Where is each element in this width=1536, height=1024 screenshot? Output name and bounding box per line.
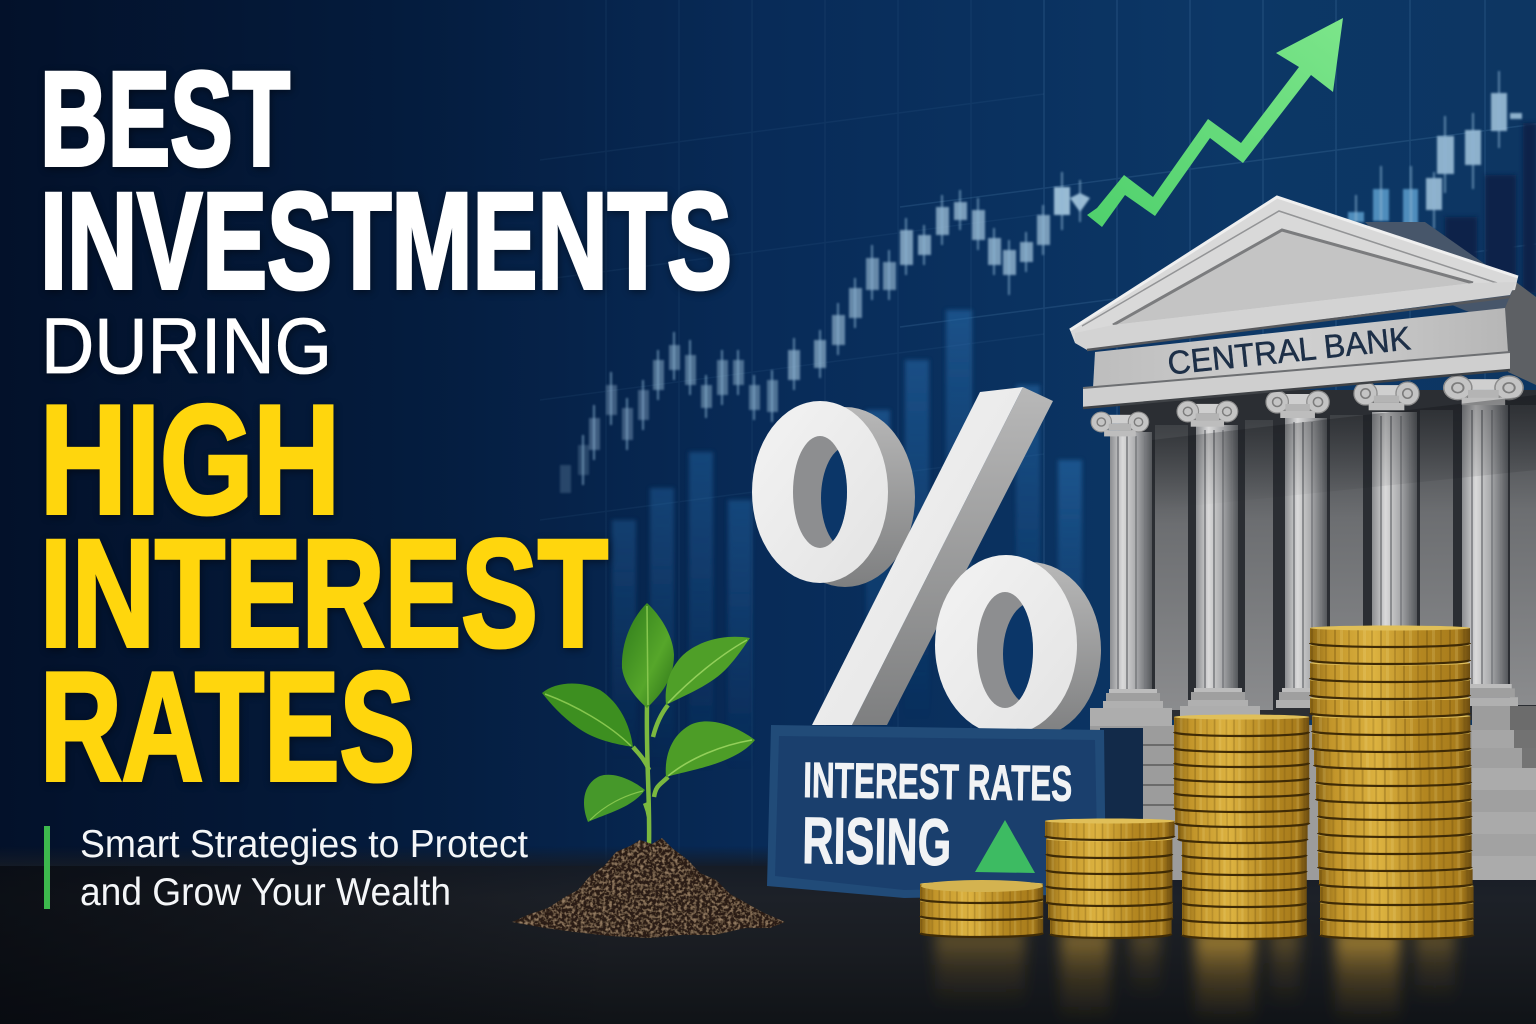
soil mound — [512, 838, 785, 938]
column: third — [1266, 391, 1336, 708]
icon: green triangle — [975, 820, 1035, 873]
rear pillars — [1155, 405, 1536, 710]
coin stack: second — [1045, 818, 1175, 938]
title line: best: BEST — [40, 45, 290, 194]
sign: interest rates rising: RISING — [802, 803, 952, 879]
bottom ring — [935, 555, 1101, 738]
leaf: top — [622, 603, 674, 708]
frieze — [1093, 308, 1508, 388]
horizontal cornice — [1075, 282, 1516, 350]
leaf: small — [584, 775, 645, 822]
label: central bank: CENTRAL BANK — [1166, 319, 1412, 382]
plant seedling — [512, 603, 785, 938]
left stairs — [1090, 725, 1536, 880]
slash — [812, 387, 1053, 725]
floor — [0, 846, 1536, 1024]
subtitle — [44, 823, 528, 914]
sign: interest rates rising — [767, 725, 1143, 898]
candlestick chart — [560, 71, 1522, 493]
column: fifth — [1444, 376, 1523, 706]
green accent bar — [44, 826, 50, 909]
pediment — [1070, 197, 1518, 343]
roof behind pediment — [1365, 222, 1536, 340]
title line: interest: INTEREST — [40, 508, 608, 679]
central bank building — [1070, 197, 1536, 880]
title line: high: HIGH — [40, 373, 340, 546]
title line: rates: RATES — [40, 640, 415, 813]
right stairs — [1472, 706, 1536, 880]
coin stack: smallest — [920, 880, 1043, 937]
back wall — [1120, 390, 1536, 720]
bar chart: background volume bars — [612, 123, 1536, 772]
coin stack: largest — [1310, 626, 1474, 939]
leaf: left — [542, 684, 633, 747]
column: fourth — [1354, 382, 1424, 708]
title line: during: DURING — [41, 301, 332, 390]
coin stack: third — [1174, 714, 1309, 939]
subtitle: Smart Strategies to Protect — [80, 823, 528, 866]
shadow under entablature — [1152, 395, 1536, 510]
stem — [633, 705, 668, 845]
subtitle: and Grow Your Wealth — [80, 871, 451, 914]
side of entablature — [1505, 282, 1536, 385]
icon: green rising arrow — [1087, 18, 1343, 227]
leaf: upper right — [666, 637, 750, 705]
column: first — [1090, 412, 1172, 726]
sign: interest rates rising: INTEREST RATES — [803, 752, 1073, 812]
icon: percent sign — [752, 387, 1101, 738]
title line: investments: INVESTMENTS — [40, 165, 732, 318]
column: second — [1177, 401, 1260, 726]
leaf: lower right — [666, 721, 755, 777]
lower band — [1083, 352, 1510, 408]
top ring — [752, 401, 915, 587]
coin reflections — [935, 932, 1455, 1024]
title — [40, 45, 732, 813]
